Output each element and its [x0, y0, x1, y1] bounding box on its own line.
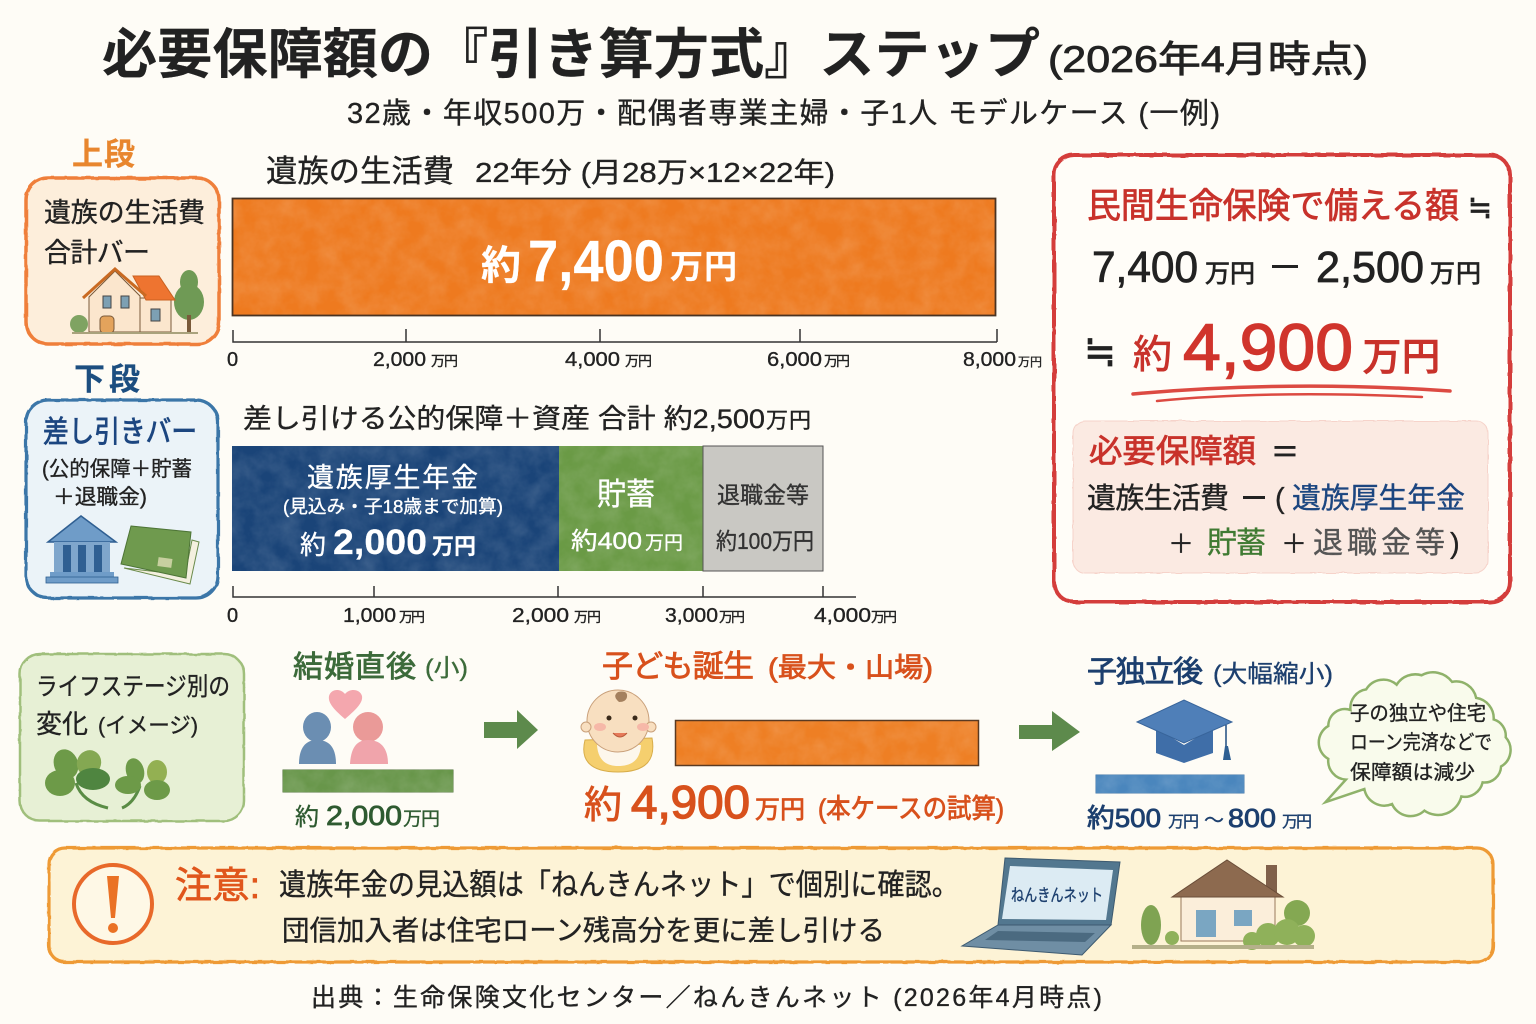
- label: upper row: 上段: [72, 137, 135, 172]
- result value: ≒: [1084, 315, 1116, 379]
- caution text: 遺族年金の見込額は「ねんきんネット」で個別に確認。: [279, 869, 959, 902]
- label text: 変化: [36, 709, 88, 739]
- callout: cloud bubble: ローン完済などで: [1350, 731, 1492, 754]
- formula: 2,500: [1316, 243, 1424, 292]
- panel: total living cost legend: [26, 178, 219, 344]
- stage: child independent: [1087, 656, 1333, 833]
- legend text: 合計バー: [44, 238, 150, 268]
- icon: laptop: [962, 858, 1120, 955]
- bar segment: savings: [559, 446, 703, 571]
- icon: couple with heart: [299, 690, 388, 764]
- bar: independent: [1096, 774, 1244, 794]
- definition box: 遺族厚生年金: [1292, 482, 1465, 515]
- bar: child birth: [676, 720, 978, 766]
- panel: deduction legend: [26, 400, 218, 598]
- bar segment: retirement: [703, 446, 823, 571]
- upper bar heading: 遺族の生活費: [266, 154, 454, 189]
- amount: 万円: [755, 796, 805, 824]
- amount: (本ケースの試算): [818, 794, 1004, 824]
- lower bar heading: 万円: [766, 408, 811, 433]
- stage heading: (小): [425, 655, 468, 682]
- panel: caution: [49, 848, 1493, 962]
- icon: graduation cap: [1137, 700, 1232, 763]
- callout: cloud bubble: [1319, 672, 1511, 816]
- result value: [1084, 310, 1440, 384]
- definition box: (: [1275, 483, 1285, 515]
- upper axis: 4,000: [565, 349, 620, 371]
- amount: 万円: [403, 809, 440, 830]
- stage heading: 子独立後: [1087, 656, 1203, 689]
- upper axis: [227, 329, 1042, 371]
- lower axis: 万円: [719, 609, 745, 625]
- definition box: ): [1450, 528, 1460, 560]
- bar value: 約: [481, 244, 521, 288]
- legend text: 遺族の生活費: [44, 198, 205, 228]
- bar segment: retirement: 約100万円: [716, 528, 814, 554]
- icon: laptop: ねんきんネット: [1011, 886, 1103, 905]
- icon: house: [1132, 860, 1315, 950]
- result value: 4,900: [1183, 310, 1353, 384]
- icon: bank building: [46, 516, 118, 583]
- amount: 約500: [1087, 803, 1161, 833]
- result value: 約: [1133, 334, 1172, 377]
- upper axis: 6,000: [767, 349, 822, 371]
- bar value: 7,400: [528, 229, 664, 294]
- legend text: 差し引きバー: [43, 416, 197, 449]
- bar segment: survivor pension: (見込み・子18歳まで加算): [283, 496, 503, 517]
- label text: [36, 673, 230, 739]
- bar segment: survivor pension: 遺族厚生年金: [307, 463, 478, 493]
- formula: [1092, 243, 1481, 292]
- stage heading: 子ども誕生: [602, 649, 754, 684]
- formula: 万円: [1205, 260, 1255, 288]
- amount: 800: [1228, 803, 1276, 833]
- panel heading: ≒: [1468, 182, 1492, 228]
- upper axis: 万円: [1018, 355, 1042, 369]
- definition box: ＋: [1168, 529, 1194, 559]
- legend text: [42, 416, 197, 509]
- source: 出典：生命保険文化センター／ねんきんネット (2026年4月時点): [311, 984, 1102, 1012]
- amount: 万円: [1168, 814, 1199, 831]
- amount: [295, 800, 440, 831]
- amount: 2,000: [326, 800, 402, 831]
- definition box: 遺族生活費: [1087, 482, 1229, 515]
- upper axis: 万円: [824, 353, 850, 369]
- bar segment: survivor pension: 約: [300, 530, 326, 560]
- lower axis: 万円: [399, 609, 425, 625]
- bar value: [481, 229, 737, 294]
- lower axis: 3,000: [665, 605, 718, 627]
- upper bar heading: [266, 154, 835, 189]
- callout: cloud bubble: 保障額は減少: [1350, 761, 1475, 784]
- amount: [584, 776, 1004, 828]
- bar segment: survivor pension: 万円: [432, 534, 476, 559]
- panel: life stage label: [20, 654, 244, 821]
- bar: after marriage: [282, 770, 454, 792]
- arrow: birth to independence: [1019, 711, 1080, 751]
- title: 必要保障額の『引き算方式』ステップ: [102, 25, 1040, 85]
- subtitle: 32歳・年収500万・配偶者専業主婦・子1人 モデルケース (一例): [347, 97, 1220, 130]
- panel: result: [1054, 155, 1510, 602]
- definition box: =: [1273, 435, 1297, 468]
- definition box: 退職金等: [1313, 527, 1445, 560]
- upper bar heading: 22年分 (月28万×12×22年): [475, 157, 835, 188]
- hand-drawn underline: [1133, 386, 1450, 401]
- label: lower row: 下段: [74, 362, 140, 397]
- panel heading: 民間生命保険で備える額: [1087, 187, 1459, 226]
- amount: 約: [295, 804, 319, 831]
- bar segment: savings: 万円: [645, 533, 683, 554]
- definition box: [1073, 421, 1488, 573]
- amount: ～: [1204, 810, 1224, 832]
- legend text: ＋退職金): [53, 486, 147, 509]
- bar: total living cost 7,400: [232, 198, 996, 316]
- lower axis: 万円: [574, 609, 601, 625]
- stacked bar: [232, 446, 823, 571]
- stage heading: (最大・山場): [768, 653, 933, 683]
- caution text: 団信加入者は住宅ローン残高分を更に差し引ける: [282, 915, 885, 946]
- icon: house with tree: [70, 269, 204, 333]
- bar segment: survivor pension: [232, 446, 559, 571]
- stage: child birth: [581, 649, 1004, 828]
- stage heading: [602, 649, 933, 684]
- bar value: 万円: [670, 248, 737, 285]
- bar segment: savings: 貯蓄: [597, 477, 655, 512]
- icon: clovers: [45, 746, 170, 808]
- definition box: 貯蓄: [1207, 527, 1266, 560]
- label text: (イメージ): [98, 713, 198, 738]
- amount: 4,900: [631, 776, 750, 828]
- upper axis: 2,000: [373, 349, 426, 371]
- caution text: [279, 869, 959, 946]
- stage heading: [1087, 656, 1333, 689]
- definition box: 必要保障額: [1089, 433, 1256, 469]
- bar segment: retirement: 退職金等: [717, 482, 809, 508]
- result value: 万円: [1363, 337, 1440, 379]
- lower bar heading: 差し引ける公的保障＋資産 合計 約2,500: [243, 404, 765, 434]
- icon: bankbook: [121, 526, 199, 584]
- lower axis: [227, 586, 897, 627]
- icon: exclamation: [74, 865, 152, 943]
- lower axis: 万円: [871, 609, 897, 625]
- arrow: marriage to birth: [484, 710, 538, 749]
- amount: 万円: [1282, 814, 1312, 831]
- formula: 7,400: [1092, 243, 1198, 292]
- title: (2026年4月時点): [1048, 39, 1368, 80]
- callout: cloud bubble: 子の独立や住宅: [1350, 702, 1486, 725]
- amount: [1087, 803, 1312, 833]
- caution label: 注意:: [175, 865, 260, 906]
- amount: 約: [584, 785, 622, 827]
- label text: ライフステージ別の: [36, 673, 230, 701]
- legend text: (公的保障＋貯蓄: [42, 458, 192, 481]
- upper axis: 0: [227, 349, 238, 371]
- upper axis: 8,000: [963, 349, 1016, 371]
- icon: baby: [581, 690, 656, 772]
- legend text: [44, 198, 205, 268]
- stage heading: 結婚直後: [293, 651, 416, 684]
- upper axis: 万円: [625, 353, 652, 369]
- bar segment: savings: 約400: [571, 528, 642, 555]
- lower axis: 0: [227, 605, 238, 627]
- stage heading: (大幅縮小): [1213, 661, 1333, 688]
- definition box: ＋: [1281, 529, 1307, 559]
- formula: 万円: [1430, 260, 1481, 288]
- stage: after marriage: [282, 651, 468, 831]
- bar segment: survivor pension: 2,000: [333, 523, 427, 562]
- lower axis: 2,000: [512, 605, 569, 627]
- upper axis: 万円: [431, 353, 458, 369]
- lower axis: 4,000: [814, 605, 871, 627]
- lower axis: 1,000: [343, 605, 396, 627]
